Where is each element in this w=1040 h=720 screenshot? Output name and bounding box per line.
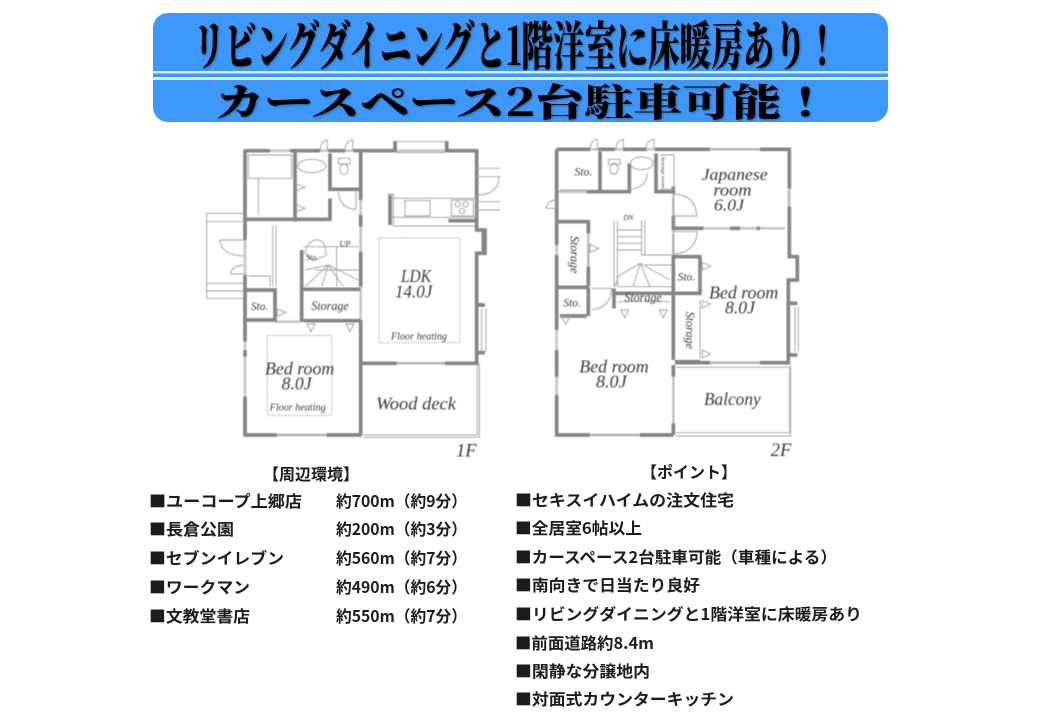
2F room labels: Sto. xyxy=(563,296,581,310)
2F walls xyxy=(557,149,797,435)
2F room labels: 2F xyxy=(771,440,792,461)
1F room labels: 14.0J xyxy=(395,281,433,301)
surroundings rows: 約700m（約9分） xyxy=(336,488,467,512)
surroundings rows: 約550m（約7分） xyxy=(336,603,467,627)
1F room labels xyxy=(251,240,477,462)
2F thin fixtures xyxy=(560,149,798,436)
surroundings rows: ■長倉公園 xyxy=(149,516,234,540)
2F room labels: Sto. xyxy=(678,270,695,284)
surroundings rows: 約560m（約7分） xyxy=(336,545,467,569)
key points heading: 【ポイント】 xyxy=(641,459,737,483)
key points list: ■リビングダイニングと1階洋室に床暖房あり xyxy=(515,601,862,625)
key points list xyxy=(515,487,862,710)
surroundings rows: ■文教堂書店 xyxy=(149,603,250,627)
2F room labels: Balcony xyxy=(704,389,761,409)
1F doors and closet markers xyxy=(220,140,499,332)
floor plan: 1F xyxy=(207,130,500,462)
1F floor heating area: LDK xyxy=(379,238,460,343)
2F room labels: Storage room xyxy=(660,157,666,188)
1F room labels: Floor heating xyxy=(269,401,326,413)
1F walls xyxy=(245,141,485,435)
1F room labels: 8.0J xyxy=(282,374,313,394)
1F room labels: Wood deck xyxy=(376,393,457,413)
2F room labels: 8.0J xyxy=(596,372,628,392)
panel: surroundings xyxy=(149,461,467,627)
surroundings heading: 【周辺環境】 xyxy=(263,461,359,485)
1F room labels: Sto. xyxy=(251,299,268,313)
1F room labels: 1F xyxy=(456,441,477,462)
2F room labels: Storage xyxy=(683,312,697,349)
floor plan: 2F xyxy=(546,139,798,461)
surroundings rows xyxy=(149,488,467,627)
1F window and light wall underlay xyxy=(218,130,477,435)
surroundings rows: 約200m（約3分） xyxy=(336,516,467,540)
banner xyxy=(153,5,888,127)
1F room labels: Bed room xyxy=(265,358,334,378)
2F window and light wall underlay xyxy=(557,149,789,435)
key points list: ■閑静な分譲地内 xyxy=(515,658,650,682)
2F room labels xyxy=(563,157,792,461)
key points list: ■対面式カウンターキッチン xyxy=(515,686,734,710)
key points list: ■南向きで日当たり良好 xyxy=(515,572,700,596)
2F room labels: room xyxy=(713,180,752,199)
key points list: ■前面道路約8.4m xyxy=(515,630,654,654)
2F room labels: Storage xyxy=(624,290,662,304)
2F room labels: DN xyxy=(622,213,634,222)
1F room labels: Floor heating xyxy=(390,330,447,342)
key points list: ■セキスイハイムの注文住宅 xyxy=(515,487,734,511)
surroundings rows: ■セブンイレブン xyxy=(149,545,284,569)
1F floor heating area: bedroom xyxy=(267,335,332,415)
1F room labels: UP xyxy=(339,240,351,249)
key points list: ■全居室6帖以上 xyxy=(515,515,642,539)
2F room labels: Bed room xyxy=(709,282,778,302)
banner headline line 2: カースペース2台駐車可能！ xyxy=(215,72,830,127)
key points list: ■カースペース2台駐車可能（車種による） xyxy=(515,544,837,568)
surroundings rows: 約490m（約6分） xyxy=(336,574,467,598)
panel: key points xyxy=(515,459,862,710)
2F room labels: 8.0J xyxy=(725,298,756,318)
2F doors and closet markers xyxy=(546,139,711,358)
2F room labels: 6.0J xyxy=(714,196,745,215)
surroundings rows: ■ワークマン xyxy=(149,574,250,598)
1F room labels: Storage xyxy=(311,299,349,313)
2F room labels: Japanese xyxy=(702,165,768,184)
2F room labels: Sto. xyxy=(574,165,592,179)
1F thin fixtures xyxy=(207,142,500,437)
surroundings rows: ■ユーコープ上郷店 xyxy=(149,488,302,512)
2F room labels: Storage xyxy=(568,236,582,274)
1F room labels: LDK xyxy=(400,266,432,286)
2F room labels: Bed room xyxy=(579,356,649,376)
1F room labels: Sto. xyxy=(306,253,318,262)
